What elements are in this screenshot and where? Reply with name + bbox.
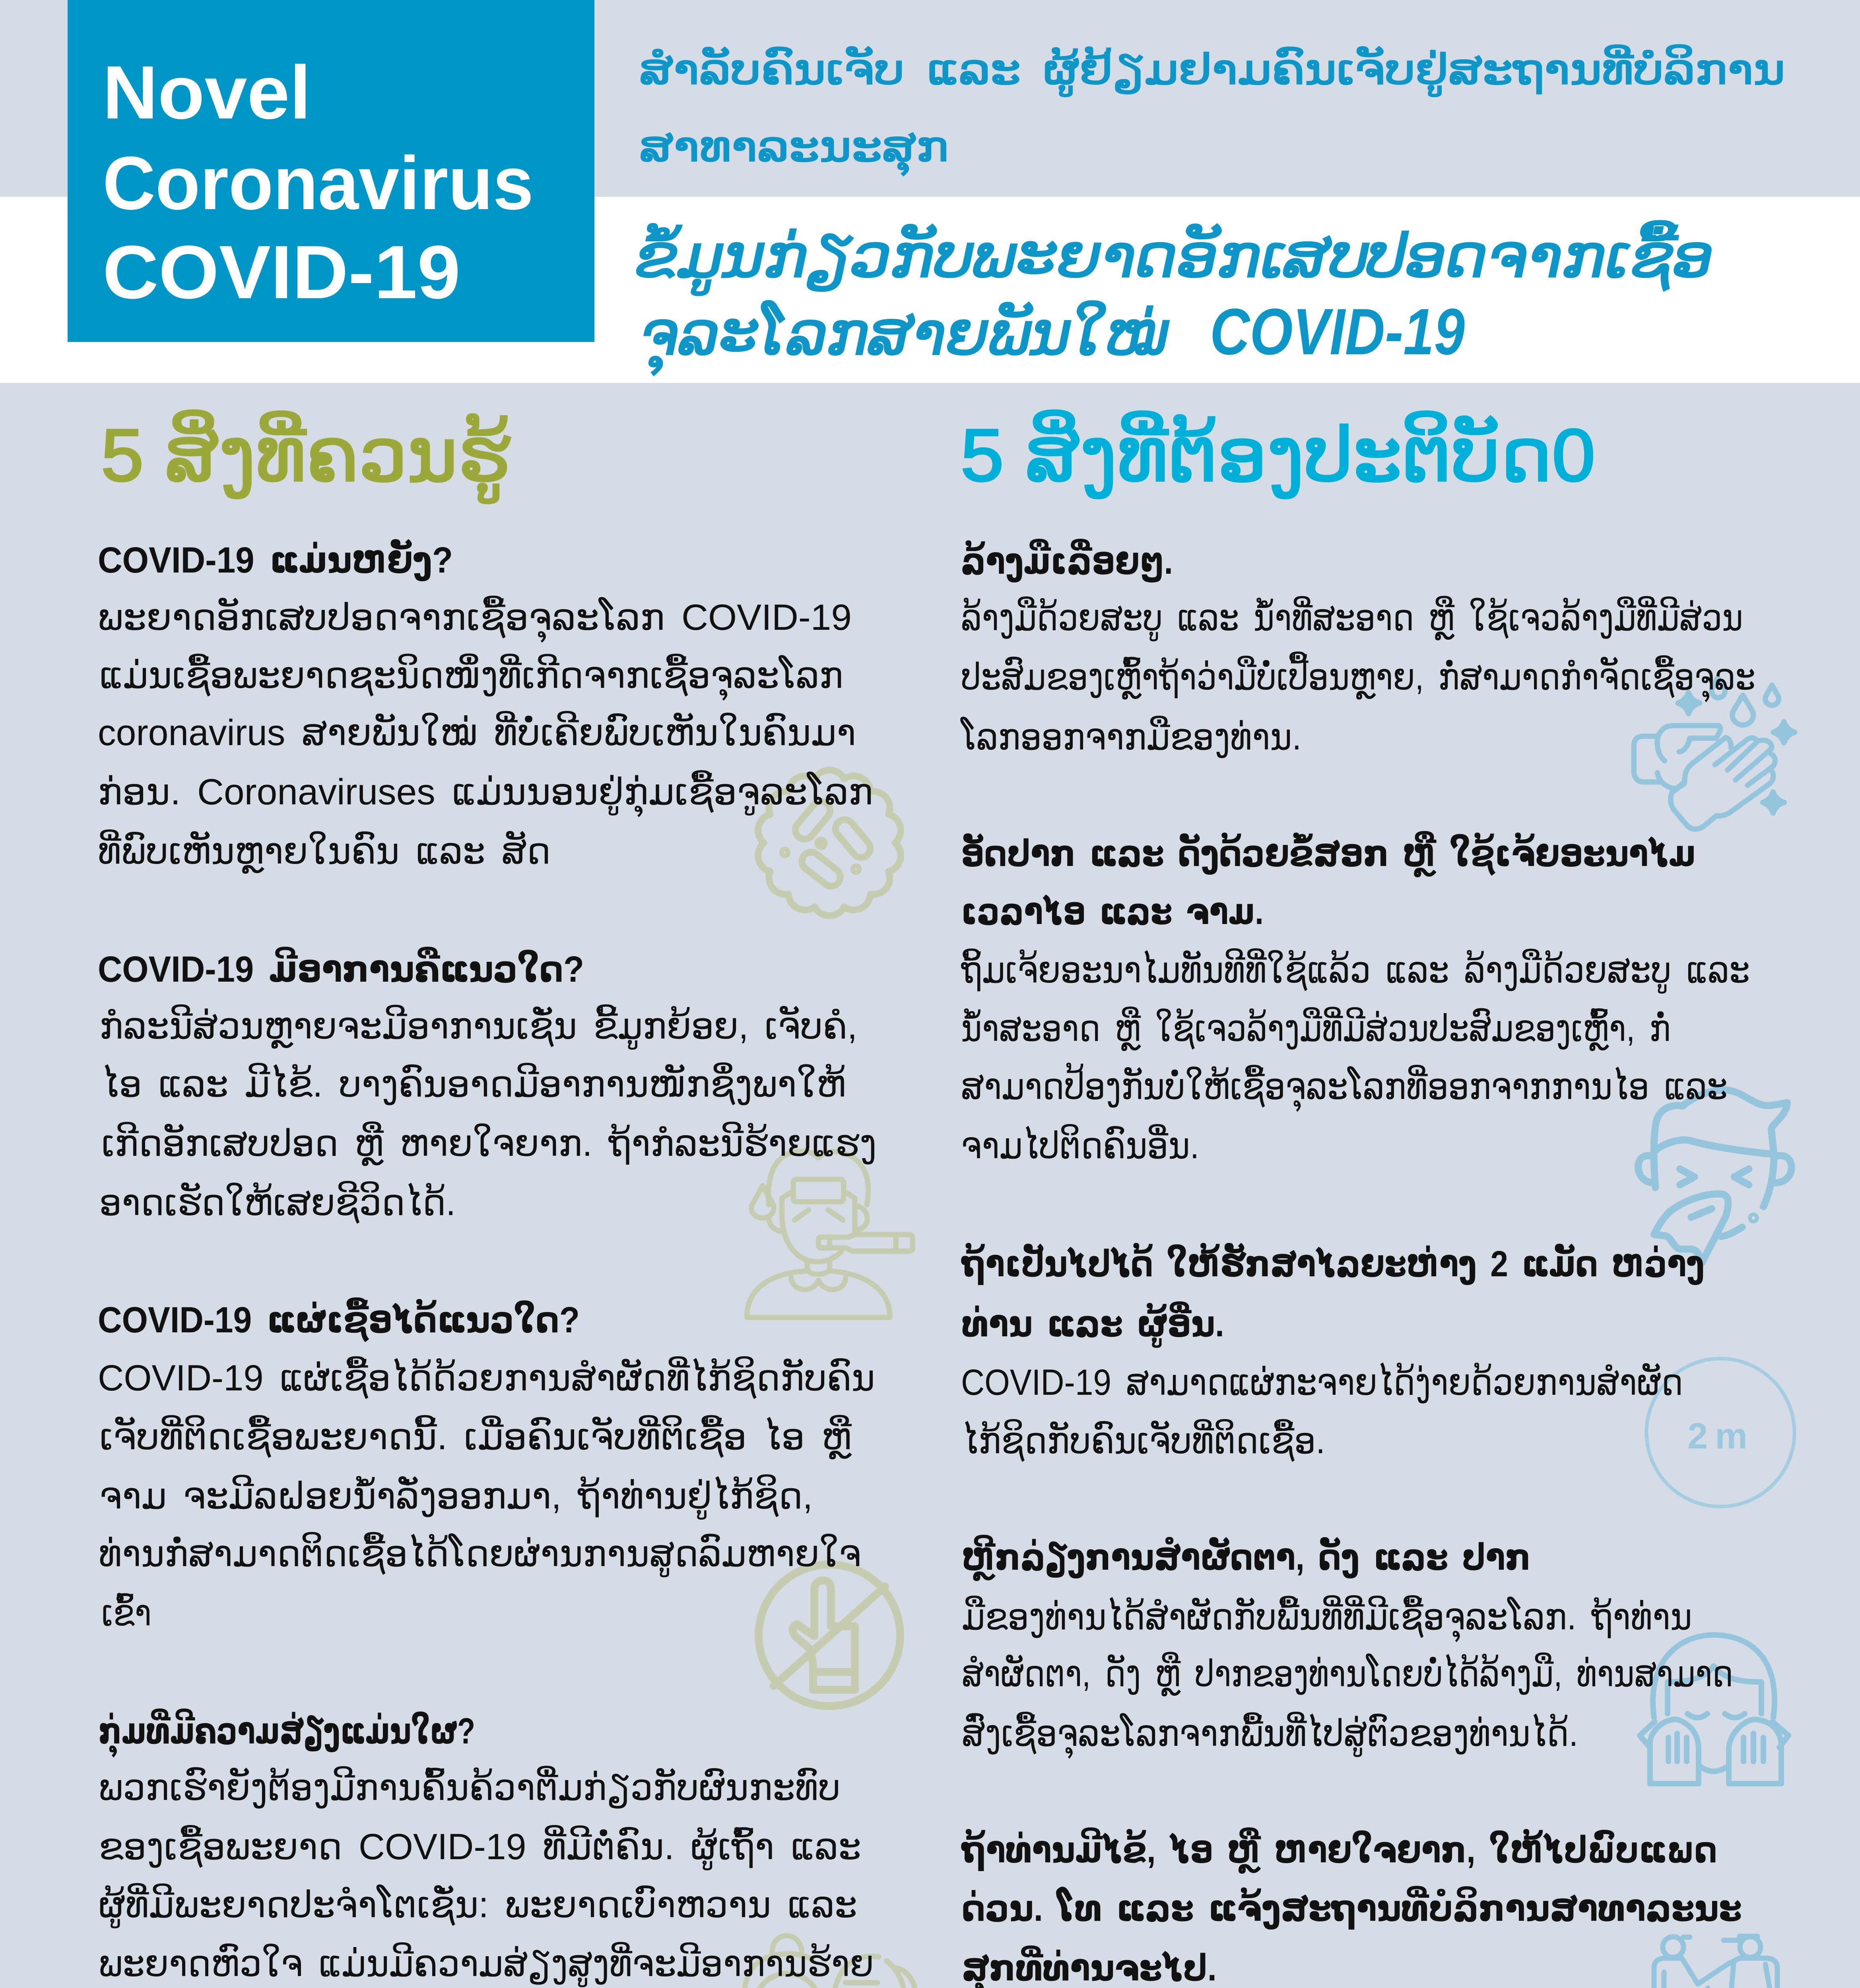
action: seek medical care (961, 1827, 1742, 1988)
action: avoid touching face: ມືຂອງທ່ານໄດ້ສຳຜັດກັບພື້ນທີ່ທີ່ມີເຊື້ອຈຸລະໂລກ. ຖ້າທ່ານ (962, 1595, 1692, 1642)
title box: Novel Coronavirus COVID-19: Novel (103, 50, 311, 135)
question: who is at risk: ພະຍາດຫົວໃຈ ແມ່ນມີຄວາມສ່ຽງສູງທີ່ຈະມີອາການຮ້າຍ (99, 1941, 874, 1987)
icon: covering face (1640, 1635, 1788, 1784)
title box: Novel Coronavirus COVID-19 (68, 0, 594, 342)
action: keep 2 metres distance (961, 1242, 1705, 1462)
question: who is at risk: ຜູ້ທີ່ມີພະຍາດປະຈຳໂຕເຊັ່ນ: ພະຍາດເບົາຫວານ ແລະ (99, 1883, 857, 1928)
action: wash hands: ປະສົມຂອງເຫຼົ້າຖ້າວ່າມືບໍ່ເປື້ອນຫຼາຍ, ກໍ່ສາມາດກຳຈັດເຊື້ອຈຸລະ (961, 651, 1755, 703)
icon: virus (758, 770, 901, 916)
icon: elderly couple (744, 1936, 915, 1988)
question: how it spreads: ເຂົ້າ (101, 1592, 151, 1633)
question: who is at risk: ກຸ່ມທີ່ມີຄວາມສ່ຽງແມ່ນໃຜ? (99, 1708, 475, 1758)
question: symptoms (98, 946, 877, 1224)
action: cover mouth and nose: ເວລາໄອ ແລະ ຈາມ. (961, 891, 1264, 932)
left column text (98, 538, 877, 1988)
question: how it spreads: ທ່ານກໍ່ສາມາດຕິດເຊື້ອໄດ້ໂດຍຜ່ານການສູດລົມຫາຍໃຈ (99, 1532, 861, 1577)
audience subtitle: ສຳລັບຄົນເຈັບ ແລະ ຜູ້ຢ້ຽມຢາມຄົນເຈັບຢູ່ສະຖານທີ່ບໍລິການ (639, 45, 1785, 97)
main italic heading: ຂໍ້ມູນກ່ຽວກັບພະຍາດອັກເສບປອດຈາກເຊື້ອ (635, 221, 1714, 295)
white header band (0, 197, 1860, 383)
action: keep 2 metres distance: COVID-19 ສາມາດແຜ່ກະຈາຍໄດ້ງ່າຍດ້ວຍການສຳຜັດ (961, 1362, 1683, 1404)
right column text (960, 538, 1755, 1988)
audience subtitle: ສາທາລະນະສຸກ (639, 124, 949, 175)
icon: sneezing person (1638, 1090, 1792, 1263)
title box: Novel Coronavirus COVID-19: Coronavirus (103, 141, 534, 225)
action: seek medical care: ຖ້າທ່ານມີໄຂ້, ໄອ ຫຼື ຫາຍໃຈຍາກ, ໃຫ້ໄປພົບແພດ (961, 1827, 1717, 1874)
question: how it spreads: ເຈັບທີ່ຕິດເຊື້ອພະຍາດນີ້. ເມື່ອຄົນເຈັບທີ່ຕິເຊື້ອ ໄອ ຫຼື (99, 1414, 852, 1460)
action: cover mouth and nose: ຖິ້ມເຈ້ຍອະນາໄມທັນທີທີ່ໃຊ້ແລ້ວ ແລະ ລ້າງມືດ້ວຍສະບູ ແລະ (961, 948, 1750, 994)
action: keep 2 metres distance: ຖ້າເປັນໄປໄດ້ ໃຫ້ຮັກສາໄລຍະຫ່າງ 2 ແມັດ ຫວ່າງ (961, 1242, 1705, 1285)
question: symptoms: ເກີດອັກເສບປອດ ຫຼື ຫາຍໃຈຍາກ. ຖ້າກໍລະນີຮ້າຍແຮງ (101, 1121, 877, 1166)
action: seek medical care: ສຸກທີ່ທ່ານຈະໄປ. (962, 1945, 1217, 1988)
question: what is COVID-19: ແມ່ນເຊື້ອພະຍາດຊະນິດໜຶ່ງທີ່ເກີດຈາກເຊື້ອຈຸລະໂລກ (99, 653, 843, 701)
icon: no touching (759, 1565, 900, 1706)
action: wash hands: ລ້າງມືເລື່ອຍໆ. (961, 538, 1173, 582)
action: keep 2 metres distance: ໄກ້ຊິດກັບຄົນເຈັບທີ່ຕິດເຊື້ອ. (962, 1419, 1325, 1462)
action: avoid touching face: ສົ່ງເຊື້ອຈຸລະໂລກຈາກພື້ນທີ່ໄປສູ່ຕົວຂອງທ່ານໄດ້. (962, 1711, 1578, 1759)
action: avoid touching face: ຫຼີກລ່ຽງການສຳຜັດຕາ, ດັງ ແລະ ປາກ (962, 1534, 1531, 1581)
left section heading: 5 ສິ່ງທີ່ຄວນຮູ້ (101, 410, 511, 503)
icon: temperature check between two people (1654, 1936, 1777, 1988)
action: cover mouth and nose (961, 830, 1750, 1166)
action: avoid touching face (962, 1534, 1733, 1759)
question: who is at risk: ພວກເຮົາຍັງຕ້ອງມີການຄົ້ນຄ້ວາຕື່ມກ່ຽວກັບຜົນກະທົບ (99, 1765, 841, 1809)
action: seek medical care: ດ່ວນ. ໂທ ແລະ ແຈ້ງສະຖານທີ່ບໍລິການສາທາລະນະ (962, 1885, 1742, 1930)
action: cover mouth and nose: ຈາມໄປຕິດຄົນອື່ນ. (961, 1124, 1199, 1166)
question: who is at risk: ຂອງເຊື້ອພະຍາດ COVID-19 ທີ່ມີຕໍ່ຄົນ. ຜູ້ເຖົ້າ ແລະ (99, 1825, 861, 1870)
question: symptoms: ໄອ ແລະ ມີໄຂ້. ບາງຄົນອາດມີອາການໜັກຊຶ່ງພາໃຫ້ (101, 1062, 846, 1105)
question: what is COVID-19: coronavirus ສາຍພັນໃໝ່ ທີ່ບໍ່ເຄີຍພົບເຫັນໃນຄົນມາ (98, 711, 856, 753)
icon: sick person with thermometer (747, 1151, 913, 1317)
main italic heading: COVID-19 (1210, 295, 1465, 368)
question: how it spreads: ຈາມ ຈະມີລຝອຍນ້ຳລັ່ງອອກມາ, ຖ້າທ່ານຢູ່ໄກ້ຊິດ, (99, 1474, 813, 1520)
question: symptoms: COVID-19 ມີອາການຄືແນວໃດ? (98, 946, 584, 990)
right section heading: 5 ສິ່ງທີ່ຕ້ອງປະຕິບັດ0 (961, 410, 1595, 499)
icon: hand washing (1634, 678, 1795, 829)
question: what is COVID-19: COVID-19 ແມ່ນຫຍັງ? (98, 538, 453, 581)
action: cover mouth and nose: ນ້ຳສະອາດ ຫຼື ໃຊ້ເຈວລ້າງມືທີ່ມີສ່ວນປະສົມຂອງເຫຼົ້າ, ກໍ່ (961, 1006, 1671, 1051)
icon: 2 metres distance circle (1646, 1359, 1794, 1507)
action: wash hands (960, 538, 1755, 758)
question: how it spreads (98, 1297, 875, 1633)
question: how it spreads: COVID-19 ແຜ່ເຊື້ອໄດ້ດ້ວຍການສຳຜັດທີ່ໄກ້ຊິດກັບຄົນ (98, 1356, 875, 1399)
action: cover mouth and nose: ອັດປາກ ແລະ ດັງດ້ວຍຂໍ້ສອກ ຫຼື ໃຊ້ເຈ້ຍອະນາໄມ (961, 830, 1696, 878)
main italic heading: ຈຸລະໂລກສາຍພັນໃໝ່ (640, 300, 1169, 375)
action: avoid touching face: ສຳຜັດຕາ, ດັງ ຫຼື ປາກຂອງທ່ານໂດຍບໍ່ໄດ້ລ້າງມື, ທ່ານສາມາດ (962, 1651, 1733, 1697)
question: what is COVID-19 (98, 538, 873, 874)
action: wash hands: ໂລກອອກຈາກມືຂອງທ່ານ. (960, 715, 1301, 758)
question: how it spreads: COVID-19 ແຜ່ເຊື້ອໄດ້ແນວໃດ? (98, 1297, 580, 1343)
question: symptoms: ກໍລະນີສ່ວນຫຼາຍຈະມີອາການເຊັ່ນ ຂີ້ມູກຍ້ອຍ, ເຈັບຄໍ, (99, 1004, 857, 1050)
main italic heading (635, 221, 1714, 375)
audience subtitle (639, 45, 1785, 175)
title box: Novel Coronavirus COVID-19: COVID-19 (103, 230, 460, 315)
question: symptoms: ອາດເຮັດໃຫ້ເສຍຊີວິດໄດ້. (99, 1180, 456, 1224)
question: what is COVID-19: ພະຍາດອັກເສບປອດຈາກເຊື້ອຈຸລະໂລກ COVID-19 (98, 595, 852, 643)
question: what is COVID-19: ກ່ອນ. Coronaviruses ແມ່ນນອນຢູ່ກຸ່ມເຊື້ອຈູລະໂລກ (98, 770, 873, 817)
icon: 2 metres distance circle: 2 m (1687, 1416, 1747, 1456)
question: who is at risk (99, 1708, 874, 1988)
action: wash hands: ລ້າງມືດ້ວຍສະບູ ແລະ ນ້ຳທີ່ສະອາດ ຫຼື ໃຊ້ເຈວລ້າງມືທີ່ມີສ່ວນ (961, 595, 1743, 641)
action: cover mouth and nose: ສາມາດປ້ອງກັນບໍ່ໃຫ້ເຊື້ອຈຸລະໂລກທີ່ອອກຈາກການໄອ ແລະ (961, 1062, 1728, 1112)
question: what is COVID-19: ທີ່ພົບເຫັນຫຼາຍໃນຄົນ ແລະ ສັດ (98, 829, 551, 874)
action: keep 2 metres distance: ທ່ານ ແລະ ຜູ້ອື່ນ. (962, 1301, 1224, 1348)
